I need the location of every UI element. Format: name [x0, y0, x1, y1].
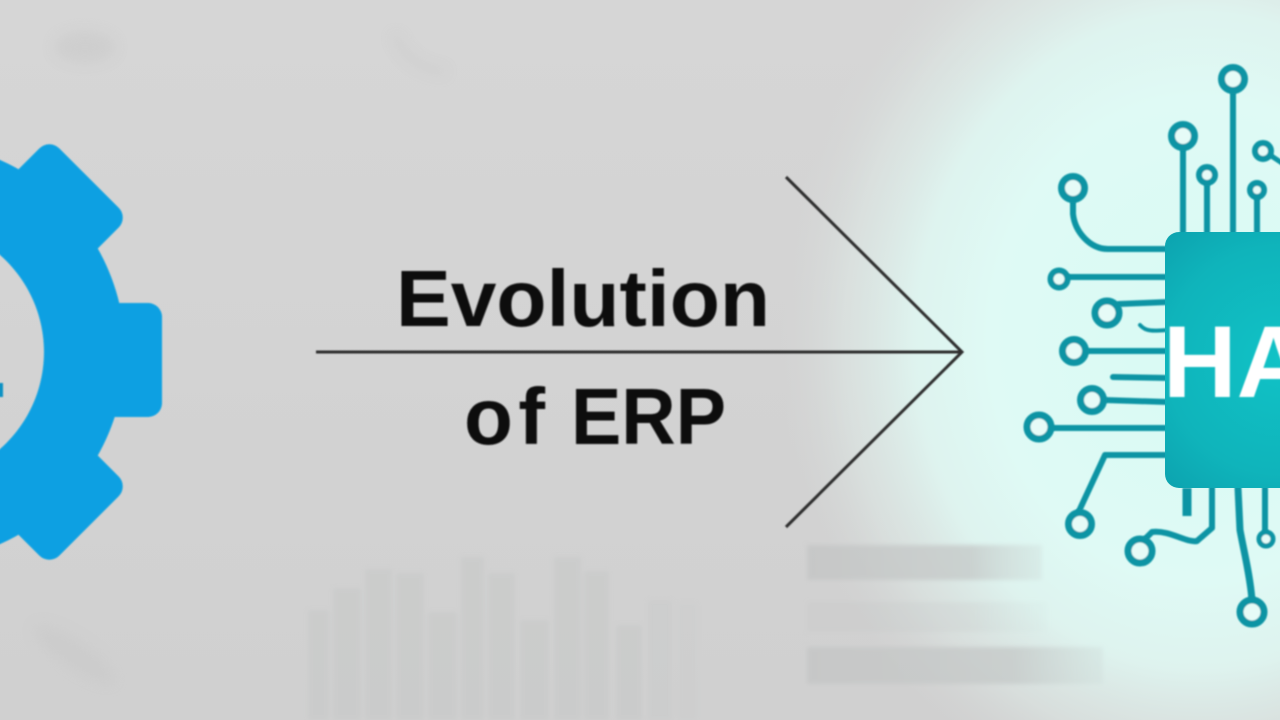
faint background bar chart — [308, 557, 697, 720]
faint background text blocks — [807, 545, 1103, 684]
title — [396, 254, 770, 461]
circuit traces — [1052, 90, 1280, 600]
icon: HANA circuit chip — [1027, 68, 1280, 624]
icon: blue gear — [0, 138, 162, 566]
title: ERP — [571, 372, 726, 461]
circuit nodes — [1027, 68, 1273, 624]
chip body — [1165, 232, 1280, 488]
title: of — [464, 372, 545, 461]
title: Evolution — [396, 254, 770, 343]
arrow with title divider — [316, 177, 962, 527]
faint background shapes — [28, 31, 445, 694]
